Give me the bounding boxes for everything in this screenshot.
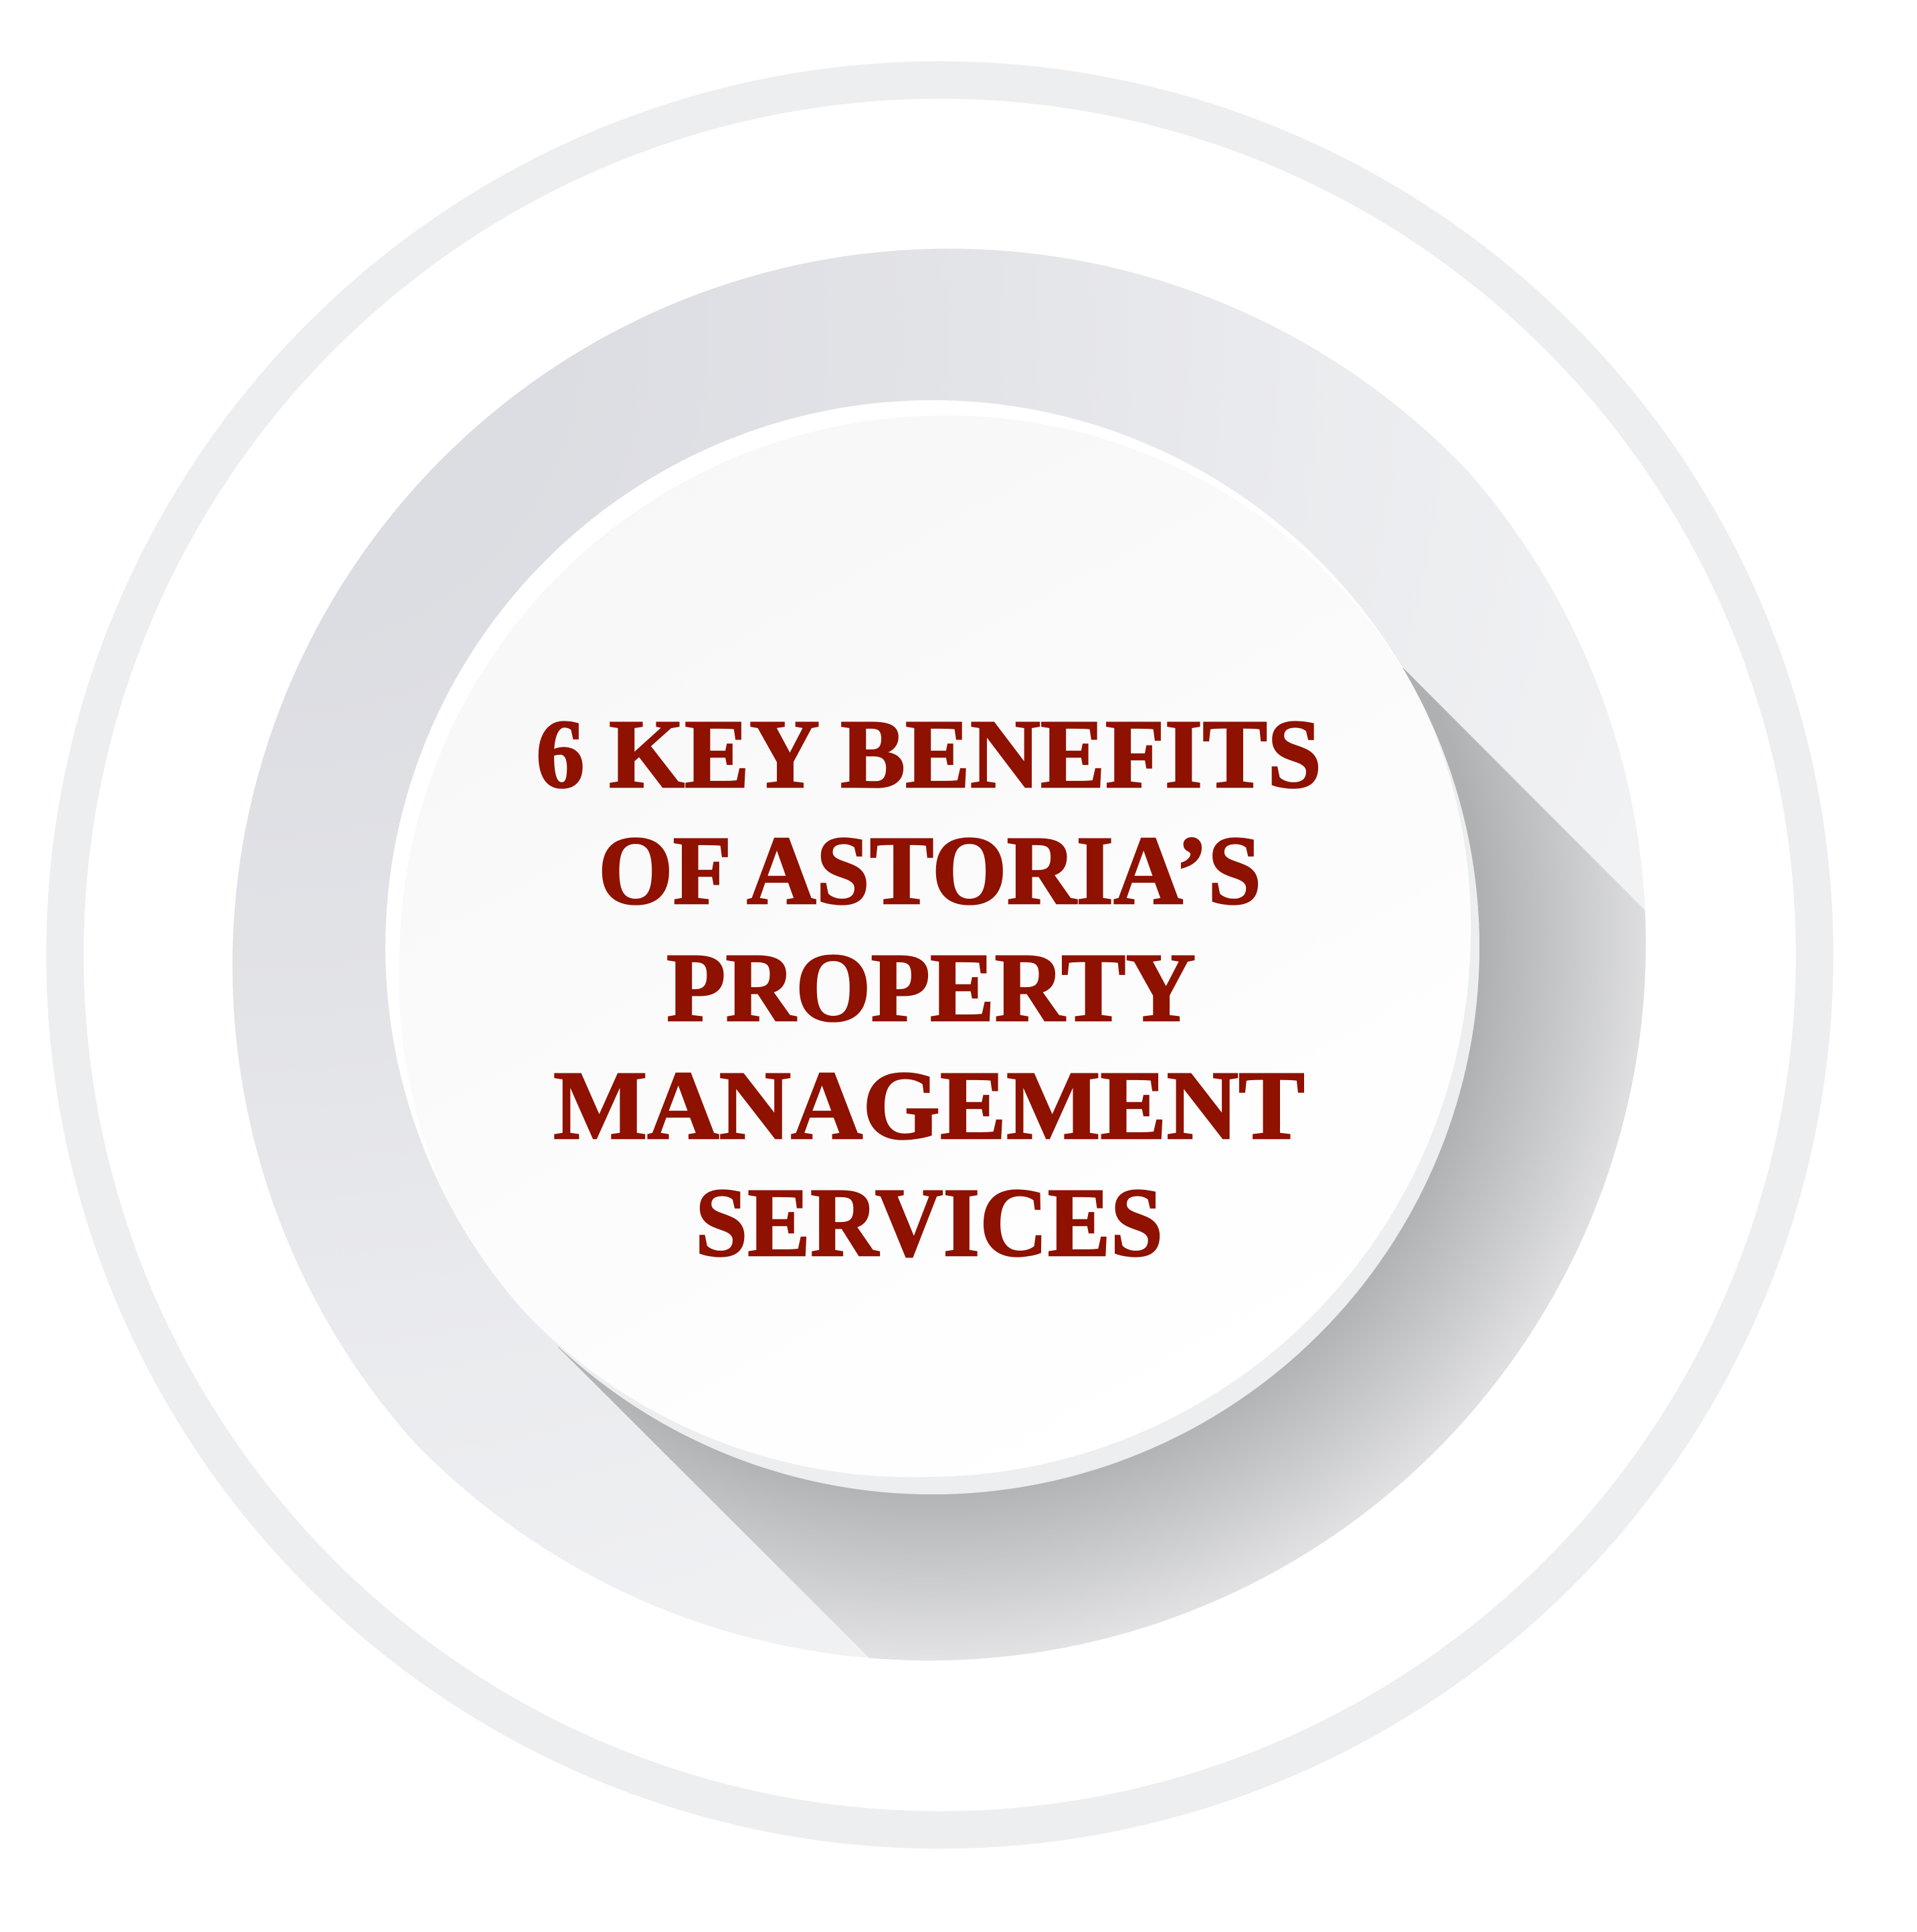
- title: MANAGEMENT: [553, 1051, 1305, 1160]
- title: 6 KEY BENEFITS: [536, 699, 1321, 808]
- title: PROPERTY: [666, 933, 1196, 1042]
- inner title disc: [483, 700, 1471, 1478]
- title: SERVICES: [695, 1168, 1163, 1277]
- title: [536, 699, 1321, 1277]
- title: OF ASTORIA’S: [598, 816, 1261, 925]
- rim crescent: [529, 711, 1479, 1494]
- middle grey disc: [232, 249, 1646, 1660]
- white disc base: [385, 400, 1479, 1494]
- long diagonal drop shadow: [558, 668, 1646, 1661]
